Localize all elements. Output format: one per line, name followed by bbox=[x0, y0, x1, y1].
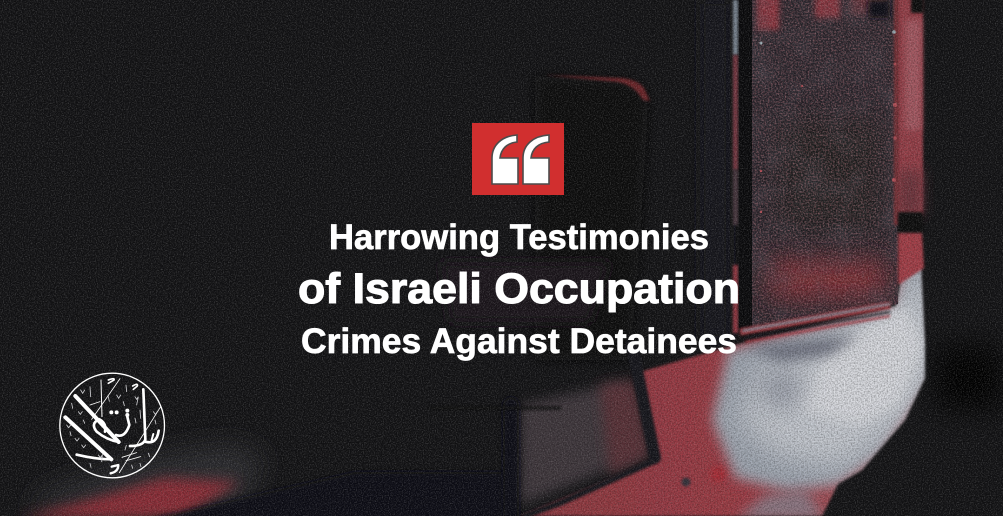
title: Harrowing Testimonies bbox=[329, 218, 709, 257]
grey haze under seat bbox=[30, 380, 650, 516]
title: Crimes Against Detainees bbox=[301, 322, 737, 361]
icon: red quote mark box bbox=[472, 123, 564, 195]
title bbox=[298, 218, 740, 361]
red glow bottom left bbox=[20, 478, 240, 516]
chair back faint silhouette bbox=[440, 75, 650, 360]
dark shadow under chair bbox=[145, 472, 503, 516]
door rivets bbox=[760, 30, 897, 213]
icon: circular calligraphy logo bbox=[60, 373, 164, 478]
title: of Israeli Occupation bbox=[298, 265, 740, 313]
open cell door and frame bbox=[733, 0, 924, 333]
chair leg and seat frame bbox=[430, 345, 726, 516]
door bottom edge highlight bbox=[740, 304, 890, 342]
lit floor with red falloff bbox=[520, 250, 940, 516]
